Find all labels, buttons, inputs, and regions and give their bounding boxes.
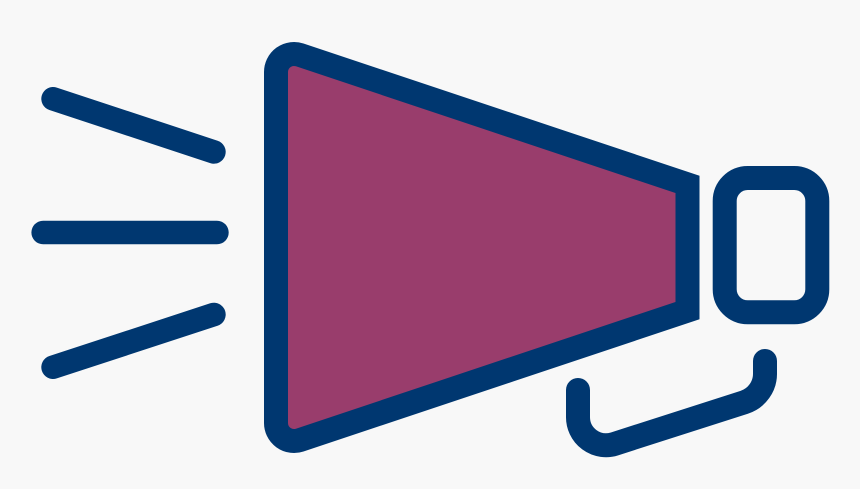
sound line: top — [53, 99, 214, 152]
sound line: bottom — [53, 314, 214, 367]
megaphone cone — [276, 54, 688, 441]
sound line: middle — [43, 221, 217, 244]
megaphone handle — [578, 361, 765, 445]
megaphone mouthpiece — [725, 178, 817, 312]
